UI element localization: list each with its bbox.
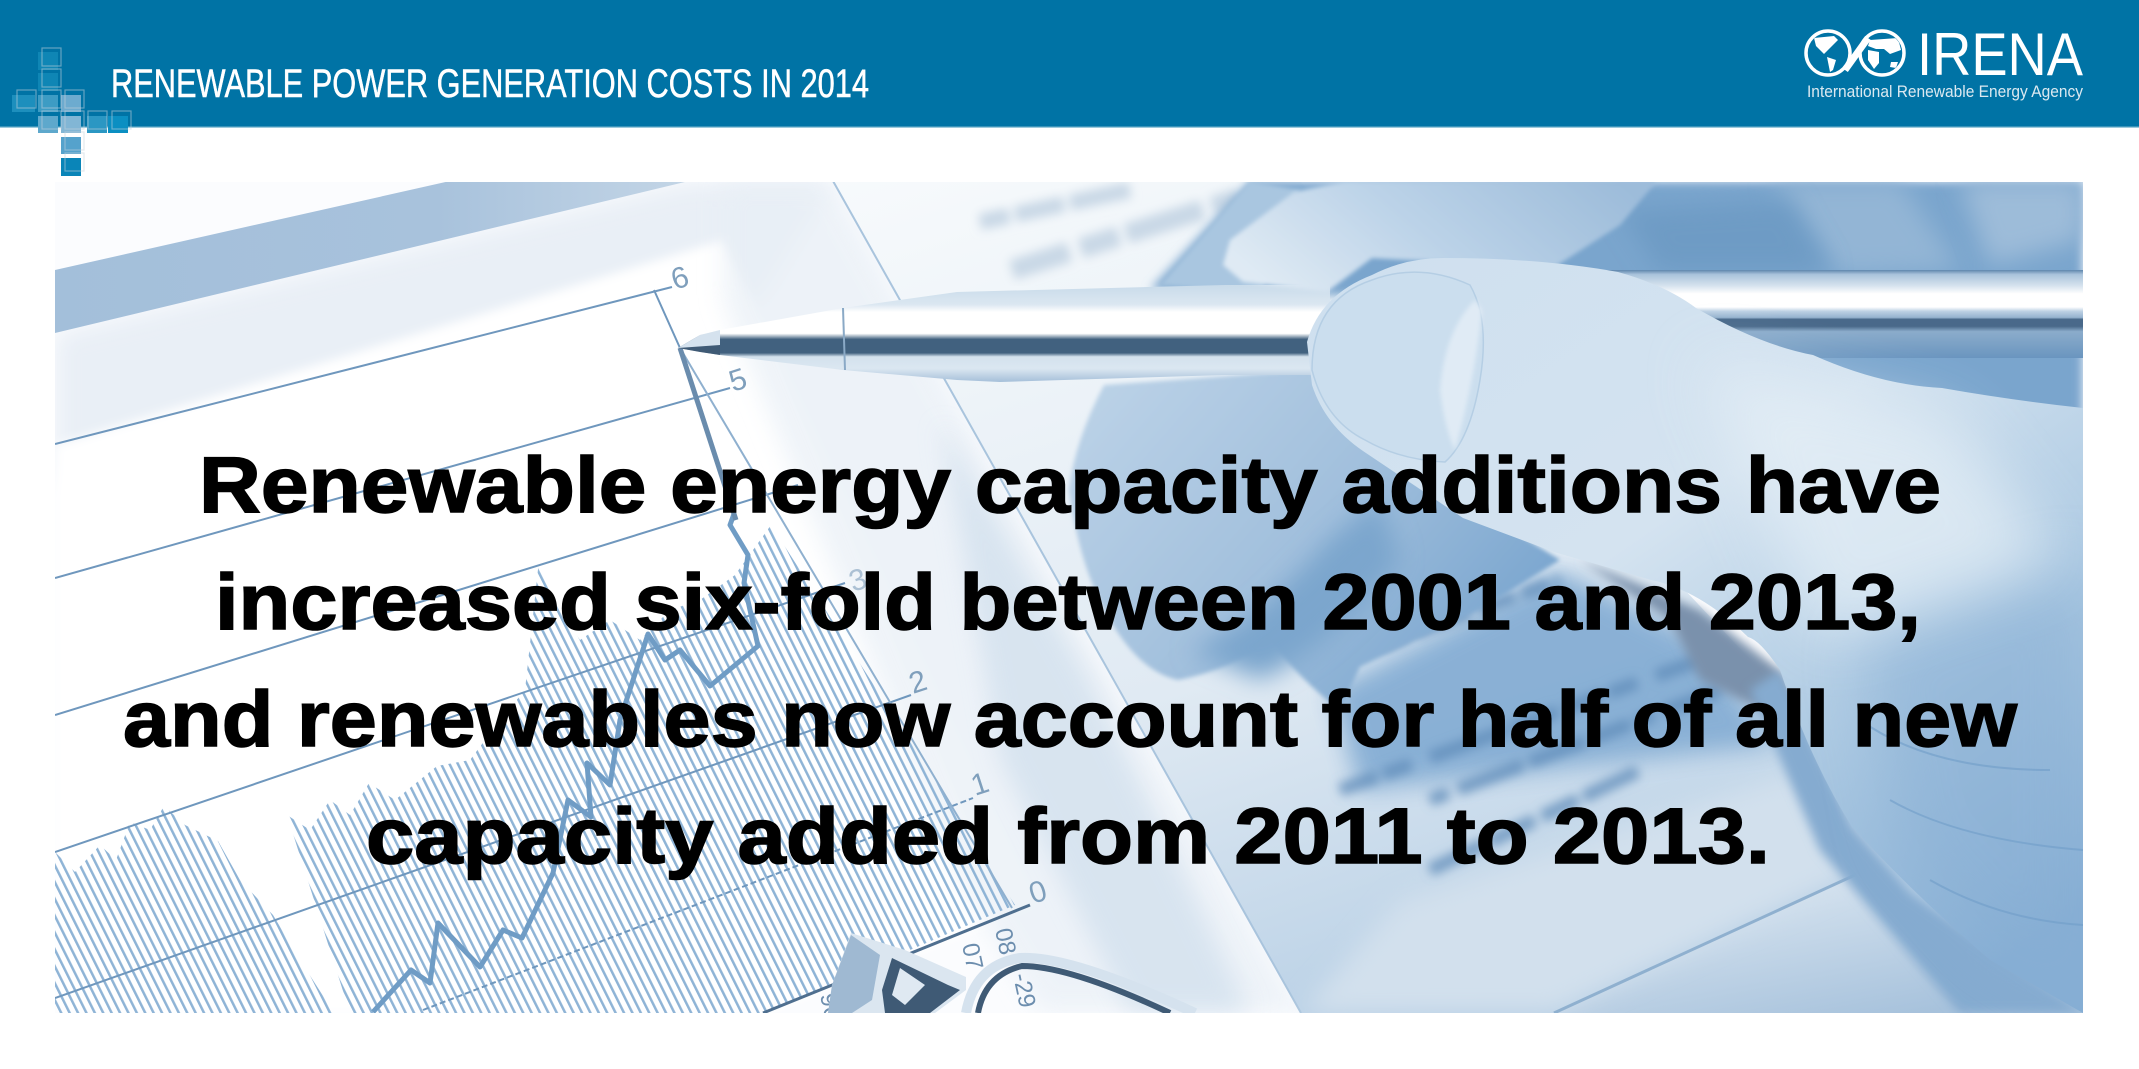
header bottom edge (0, 126, 2139, 128)
soft shaded paper below band (55, 182, 734, 442)
axis labels: 3 (845, 562, 871, 599)
trend line (373, 514, 758, 1012)
title: RENEWABLE POWER GENERATION COSTS IN 2014 (111, 62, 869, 106)
headline text (123, 440, 2018, 880)
date labels: 07 (956, 941, 988, 972)
icon: blue squares cross motif (12, 48, 131, 176)
date labels: -29 (1007, 971, 1041, 1010)
nail highlight (1440, 300, 1482, 450)
blurred lower text (1340, 580, 1720, 870)
palm creases (1860, 720, 2083, 925)
date labels: 08 (989, 926, 1021, 957)
back fingers (1150, 181, 2083, 420)
header banner (0, 0, 2139, 127)
blurred upper text (980, 190, 1240, 270)
pale strip beside chart (723, 182, 1301, 1013)
headline line 2: increased six-fold between 2001 and 2013, (215, 557, 1921, 646)
bars: main cluster (287, 525, 1015, 1013)
shadow below palm (1584, 561, 1787, 713)
logo wordmark: IRENA (1917, 21, 2083, 88)
palm shading (1860, 576, 2081, 834)
bars: left cluster (55, 806, 334, 1013)
shaded page area with blurred text (1330, 570, 1775, 790)
axis labels: 2 (905, 664, 931, 701)
axis labels: 5 (725, 362, 751, 399)
photo: hand holding pen over chart (55, 181, 2083, 1022)
axis labels (667, 260, 1051, 911)
logo: IRENA (1804, 29, 2083, 100)
lower sheet (1662, 881, 2082, 1013)
headline line 4: capacity added from 2011 to 2013. (366, 791, 1770, 880)
right paper (833, 181, 2083, 1013)
pen right section (1560, 270, 2083, 358)
middle finger under pen (1069, 370, 1560, 710)
fold line (833, 181, 1301, 1013)
axis labels: 6 (667, 260, 693, 297)
grid lines (55, 287, 1030, 1013)
logo subtitle: International Renewable Energy Agency (1807, 83, 2084, 101)
paper base (55, 182, 2083, 1013)
bar chart (55, 260, 1051, 1022)
white chart sheet (56, 242, 736, 483)
top band of sheet (55, 181, 689, 333)
thumb nail (1312, 272, 1483, 462)
pen left section (678, 285, 1330, 382)
date labels: 96 (814, 991, 846, 1022)
headline line 1: Renewable energy capacity additions have (199, 440, 1941, 529)
headline line 3: and renewables now account for half of all new (123, 674, 2018, 763)
axis labels: 0 (1025, 874, 1051, 911)
axis labels: 1 (967, 766, 993, 803)
date labels (820, 928, 1036, 1013)
thumb and palm (1307, 258, 2083, 1013)
icon: globes infinity (1806, 31, 1904, 75)
glasses (828, 933, 1195, 1013)
index finger (1223, 181, 1657, 292)
